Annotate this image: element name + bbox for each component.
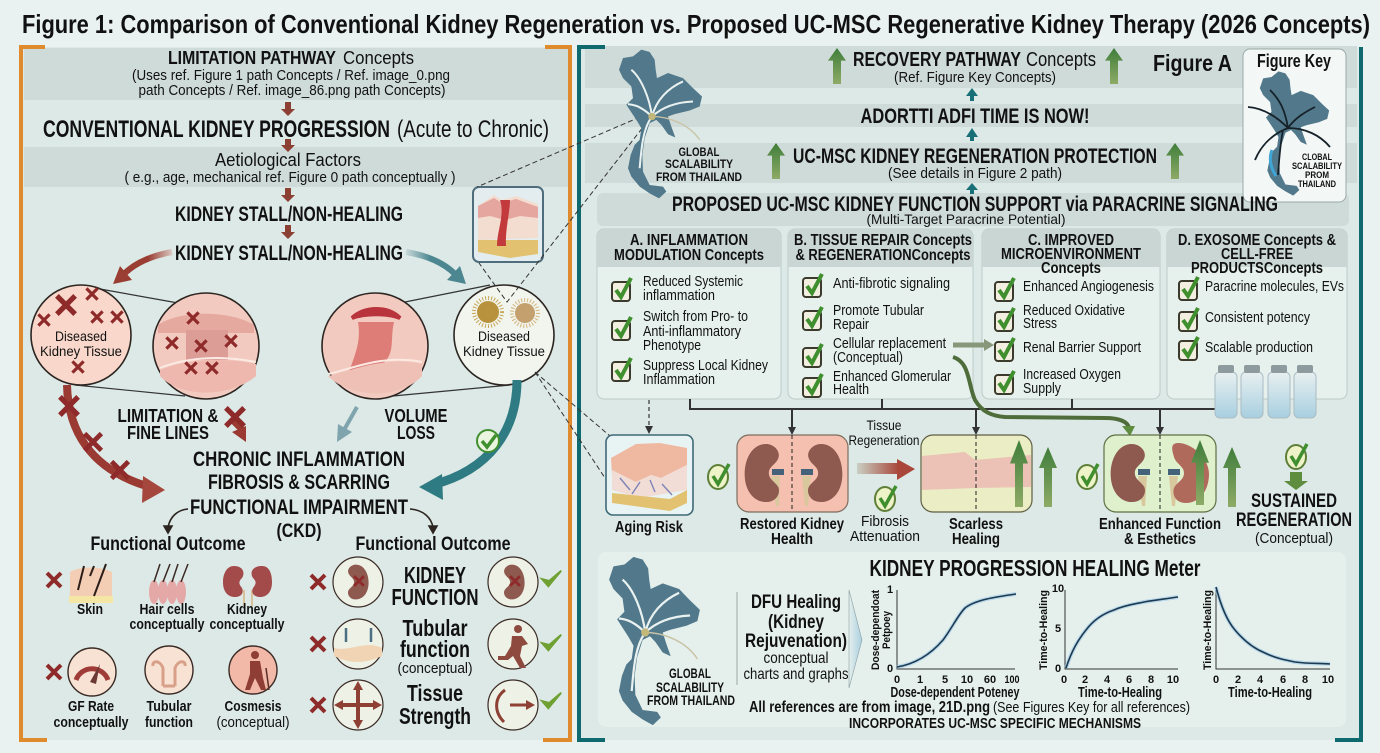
chart: dose-dependent potency: Dose-dependoat — [870, 590, 882, 670]
chart: time-to-healing falling — [1202, 587, 1334, 701]
card B: B. TISSUE REPAIR Concepts — [794, 232, 972, 249]
heading: protection: (See details in Figure 2 path) — [888, 165, 1062, 182]
arrow — [281, 102, 295, 116]
row: kidney function — [311, 557, 561, 610]
card B: Promote Tubular — [833, 303, 924, 319]
heading: recovery pathway — [828, 48, 1123, 86]
icon group: kidney — [210, 566, 284, 633]
text: DFU healing: DFU Healing — [751, 592, 841, 613]
chart: dose-dependent potency: 5 — [942, 674, 948, 686]
icon group: cosmesis — [216, 646, 290, 731]
panel: figure key: CLOBAL — [1302, 152, 1332, 163]
panel: figure key — [1243, 49, 1346, 202]
heading: conventional progression: (Acute to Chronic) — [397, 116, 549, 143]
card A: A. INFLAMMATION — [630, 232, 748, 249]
label: global scalability: FROM THAILAND — [647, 692, 735, 708]
text: references note: (See Figures Key for all references) — [993, 699, 1190, 716]
circle: diseased tissue left: Kidney Tissue — [40, 343, 122, 359]
box: restored kidney health: Restored Kidney — [740, 516, 844, 533]
chart: dose-dependent potency: 100 — [1004, 674, 1020, 686]
label: volume loss: VOLUME — [384, 406, 448, 426]
row: tissue strength: Tissue — [407, 680, 463, 706]
row: tissue strength — [311, 680, 561, 730]
icon: vials — [1215, 365, 1316, 418]
teal bracket — [579, 47, 1361, 740]
arrow: regeneration — [857, 459, 915, 480]
text: references — [132, 68, 450, 99]
row: kidney function: FUNCTION — [392, 584, 478, 610]
heading: kidney stall 1: KIDNEY STALL/NON-HEALING — [175, 203, 403, 226]
icon: Thailand map bottom — [609, 557, 700, 725]
chart: dose-dependent potency: Dose-dependent Poteney — [890, 685, 1020, 701]
row: tubular function: function — [400, 636, 470, 662]
box: scarless healing — [921, 435, 1032, 548]
chart: dose-dependent potency: 1 — [917, 674, 923, 686]
card A: Suppress Local Kidney — [643, 358, 769, 374]
arrow: dark green curve — [953, 357, 1135, 436]
label: global scalability: SCALABILITY — [665, 157, 733, 171]
arrow: teal right branch — [406, 252, 466, 284]
icon group: hair cells — [130, 564, 204, 633]
box: enhanced function: Enhanced Function — [1099, 516, 1221, 533]
card C: Increased Oxygen — [1023, 367, 1121, 383]
arrow — [281, 139, 295, 152]
row: tissue strength: Strength — [399, 703, 471, 729]
label: fibrosis attenuation: Fibrosis — [861, 513, 909, 530]
card B: Anti-fibrotic signaling — [833, 276, 950, 292]
card B — [788, 229, 973, 399]
box: restored kidney health: Health — [771, 531, 813, 548]
arrow: dashed to aging risk — [645, 400, 653, 434]
text: references note — [749, 699, 1190, 716]
panel: figure key: Figure Key — [1257, 51, 1331, 71]
arrowheads — [788, 427, 1164, 435]
card B: Repair — [833, 317, 869, 333]
chart: time-to-healing rising: 10 — [1167, 674, 1179, 686]
text: DFU healing: conceptual — [764, 650, 828, 667]
panel: healing meter — [598, 552, 1346, 732]
text: DFU healing — [744, 592, 848, 683]
arrow: small teal up — [966, 183, 978, 194]
circle: diseased tissue right: Kidney Tissue — [463, 343, 545, 359]
card C: C. IMPROVED — [1028, 232, 1114, 249]
heading: proposed paracrine signaling: (Multi-Target Paracrine Potential) — [866, 211, 1066, 227]
card B: Enhanced Glomerular — [833, 369, 951, 385]
text: chronic inflammation block: CHRONIC INFLAMMATION — [193, 448, 405, 471]
label: global scalability: FROM THAILAND — [656, 170, 742, 184]
chart: time-to-healing rising: 6 — [1126, 674, 1132, 686]
box: enhanced function — [1099, 435, 1221, 548]
card D: Paracrine molecules, EVs — [1205, 279, 1344, 295]
circle: diseased tissue left: Diseased — [55, 328, 107, 344]
row: tubular function: Tubular — [402, 615, 468, 641]
heading: protection — [767, 143, 1184, 182]
chart: dose-dependent potency: 0 — [894, 674, 900, 686]
text: aetiological factors — [124, 150, 456, 186]
heading: functional outcome left: Functional Outcome — [90, 534, 246, 555]
label: tissue regeneration: Tissue — [866, 417, 902, 433]
heading: proposed paracrine signaling — [672, 193, 1278, 227]
icon group: tubular function — [145, 646, 193, 731]
card D: Scalable production — [1205, 340, 1313, 356]
chart: time-to-healing rising: 4 — [1104, 674, 1111, 686]
icon: up arrow — [1039, 447, 1057, 507]
icon group: GF rate: conceptually — [54, 715, 128, 731]
card C — [982, 229, 1160, 399]
connector lines — [75, 285, 510, 396]
card A: Switch from Pro- to — [643, 309, 748, 325]
chart: dose-dependent potency: 10 — [961, 674, 973, 686]
card B: Cellular replacement — [833, 336, 946, 352]
chart: time-to-healing falling: Time-to-Healing — [1228, 685, 1312, 701]
panel: figure key: SCALABILITY — [1292, 161, 1343, 172]
card C: Renal Barrier Support — [1023, 340, 1141, 356]
card D — [1167, 229, 1347, 399]
icon group: skin — [47, 564, 113, 618]
panel: figure key: THAILAND — [1298, 179, 1336, 190]
heading: meter: KIDNEY PROGRESSION HEALING Meter — [870, 555, 1201, 581]
heading: kidney stall 2: KIDNEY STALL/NON-HEALING — [175, 242, 403, 265]
card C: Stress — [1023, 316, 1057, 332]
panel: limitation pathway — [21, 47, 571, 740]
heading: functional outcome right: Functional Outcome — [356, 534, 510, 555]
chart: time-to-healing falling: 2 — [1235, 674, 1241, 686]
text: chronic inflammation block: (CKD) — [276, 521, 322, 542]
icon: up arrow — [1223, 447, 1241, 507]
label: global scalability: GLOBAL — [669, 665, 711, 681]
heading: limitation pathway: Concepts — [343, 48, 414, 68]
card C: Supply — [1023, 381, 1062, 397]
text: aetiological factors: ( e.g., age, mechanical ref. Figure 0 path conceptually ) — [124, 169, 456, 186]
label: global scalability — [656, 145, 742, 184]
box: scarless healing: Scarless — [949, 516, 1003, 533]
dashed connectors — [477, 117, 647, 478]
label: volume loss: LOSS — [397, 423, 435, 443]
chart: time-to-healing rising: 8 — [1148, 674, 1154, 686]
icon group: hair cells: Hair cells — [140, 602, 194, 618]
label: limitation and fine lines: FINE LINES — [127, 423, 209, 443]
label: sustained regeneration: (Conceptual) — [1255, 530, 1333, 547]
box: enhanced function: & Esthetics — [1124, 531, 1196, 548]
label: sustained regeneration: SUSTAINED — [1251, 491, 1337, 512]
icon: check 1 — [708, 464, 729, 489]
arrow: red left branch — [113, 252, 172, 284]
card B: (Conceptual) — [833, 350, 903, 366]
card D: D. EXOSOME Concepts & — [1178, 232, 1336, 249]
arrows: split to outcomes — [164, 509, 437, 533]
chart: time-to-healing rising: 2 — [1082, 674, 1088, 686]
text: mechanisms: INCORPORATES UC-MSC SPECIFIC MECHANISMS — [849, 716, 1141, 732]
arrow: limitation crossed — [226, 408, 246, 442]
divider and chevron — [737, 590, 862, 688]
card C: Enhanced Angiogenesis — [1023, 279, 1154, 295]
heading: protection: UC-MSC KIDNEY REGENERATION PROTECTION — [793, 145, 1157, 168]
arrow: thin teal — [337, 407, 357, 442]
text: DFU healing: (Kidney — [768, 612, 824, 633]
text: aetiological factors: Aetiological Factors — [215, 150, 361, 170]
chart: dose-dependent potency: 1 — [887, 584, 893, 596]
label: global scalability: GLOBAL — [678, 145, 720, 159]
card D: Consistent potency — [1205, 310, 1311, 326]
row: kidney function: KIDNEY — [404, 562, 466, 588]
label: fibrosis attenuation: Attenuation — [850, 528, 920, 545]
card D: CELL-FREE — [1221, 246, 1293, 263]
panel: recovery pathway — [477, 46, 1361, 740]
icon group: hair cells: conceptually — [130, 617, 204, 633]
icon group: skin: Skin — [77, 602, 103, 618]
label: global scalability — [647, 665, 735, 708]
arrow: B to C — [953, 339, 994, 351]
arrow: red crossed pathway — [60, 385, 165, 503]
chart: time-to-healing falling: Time-to-Healing — [1202, 590, 1214, 670]
icon group: GF rate: GF Rate — [68, 699, 114, 715]
icon group: GF rate — [47, 648, 128, 731]
text: chronic inflammation block: FUNCTIONAL IMPAIRMENT — [190, 496, 408, 519]
box: scarless healing: Healing — [952, 531, 1000, 548]
row: tubular function: (conceptual) — [398, 660, 473, 677]
heading: adopt time is now: ADORTTI ADFI TIME IS NOW! — [860, 105, 1090, 128]
icon group: tubular function: function — [145, 715, 193, 731]
text: DFU healing: Rejuvenation) — [745, 631, 847, 652]
arrow — [281, 225, 295, 239]
icon: Thailand map top — [619, 50, 702, 198]
box: aging risk: Aging Risk — [615, 519, 683, 536]
icon: check and down arrow — [1284, 444, 1308, 490]
text: references: path Concepts / Ref. image_86.png path Concepts) — [138, 83, 446, 99]
label: tissue regeneration: Regeneration — [848, 432, 920, 448]
chart: time-to-healing falling: 10 — [1322, 674, 1334, 686]
label: sustained regeneration — [1236, 491, 1352, 547]
chart: time-to-healing rising: Time-to-Healing — [1078, 685, 1162, 701]
row: tubular function — [311, 615, 561, 677]
heading: recovery pathway: Concepts — [1026, 49, 1096, 71]
chart: time-to-healing rising: 0 — [1055, 663, 1061, 675]
circle: diseased tissue right: Diseased — [478, 328, 530, 344]
text: references: (Uses ref. Figure 1 path Concepts / Ref. image_0.png — [132, 68, 450, 84]
box: restored kidney health — [737, 435, 848, 548]
icon group: tubular function: Tubular — [146, 699, 192, 715]
circle: diseased tissue left — [31, 285, 131, 385]
chart: time-to-healing falling: 0 — [1213, 674, 1219, 686]
label: limitation and fine lines — [118, 406, 218, 443]
card C: MICROENVIRONMENT — [1001, 246, 1141, 263]
arrow: small teal up — [966, 128, 978, 141]
tree connector lines — [690, 399, 1215, 428]
text: DFU healing: charts and graphs — [744, 666, 848, 683]
card C: Concepts — [1041, 260, 1101, 277]
label: limitation and fine lines: LIMITATION & — [118, 406, 218, 426]
card D: PRODUCTSConcepts — [1191, 260, 1323, 277]
inset: skin wound — [473, 187, 543, 262]
card C: Reduced Oxidative — [1023, 303, 1125, 319]
text: chronic inflammation block: FIBROSIS & SCARRING — [208, 471, 390, 494]
chart: time-to-healing rising: Time-to-Healing — [1038, 590, 1050, 670]
chart: time-to-healing rising: 0 — [1061, 674, 1067, 686]
chart: time-to-healing falling: 6 — [1280, 674, 1286, 686]
chart: time-to-healing falling: 4 — [1257, 674, 1264, 686]
arrow: small teal up — [966, 88, 978, 101]
icon group: cosmesis: (conceptual) — [216, 715, 290, 731]
heading: recovery pathway: (Ref. Figure Key Concepts) — [894, 69, 1056, 86]
text: chronic inflammation block — [190, 448, 408, 542]
card B: Health — [833, 382, 869, 398]
chart: dose-dependent potency — [870, 584, 1020, 701]
chart: dose-dependent potency: Petpoey — [881, 610, 893, 649]
icon group: cosmesis: Cosmesis — [224, 699, 282, 715]
heading: recovery pathway: RECOVERY PATHWAY — [853, 49, 1022, 71]
box: aging risk — [606, 435, 693, 536]
label: fibrosis attenuation — [850, 513, 920, 545]
chart: time-to-healing rising — [1038, 583, 1179, 701]
chart: time-to-healing rising: 5 — [1055, 623, 1061, 635]
card A: Phenotype — [643, 338, 701, 354]
label: volume loss — [384, 406, 448, 443]
chart: time-to-healing falling: 8 — [1302, 674, 1308, 686]
card A — [597, 229, 781, 399]
card A: Anti-inflammatory — [643, 324, 742, 340]
chart: dose-dependent potency: 0 — [887, 663, 893, 675]
icon group: kidney: conceptually — [210, 617, 284, 633]
circle: tissue damage — [153, 293, 259, 399]
panel: figure key: PROM — [1305, 170, 1329, 181]
chart: time-to-healing rising: 10 — [1052, 583, 1064, 595]
arrow: teal healing pathway — [419, 380, 517, 500]
card A: inflammation — [643, 288, 715, 304]
orange bracket — [21, 47, 570, 740]
icon group: kidney: Kidney — [227, 602, 267, 618]
icon: check 2 — [875, 486, 896, 511]
circle: tissue volume loss — [322, 293, 428, 399]
label: global scalability: SCALABILITY — [656, 679, 724, 695]
icon: check 3 — [1077, 464, 1098, 489]
heading: conventional progression: CONVENTIONAL KIDNEY PROGRESSION — [43, 116, 390, 143]
heading: limitation pathway: LIMITATION PATHWAY — [168, 48, 336, 68]
card A: Inflammation — [643, 372, 715, 388]
chart: dose-dependent potency: 60 — [984, 674, 996, 686]
arrow — [281, 188, 295, 202]
text: references note: All references are from image, 21D.png — [749, 699, 990, 716]
label: figure A: Figure A — [1153, 50, 1232, 76]
circle: diseased tissue right — [454, 285, 554, 385]
label: tissue regeneration — [848, 417, 920, 448]
card A: Reduced Systemic — [643, 274, 743, 290]
card B: & REGENERATIONConcepts — [796, 247, 970, 264]
card A: MODULATION Concepts — [614, 247, 764, 264]
